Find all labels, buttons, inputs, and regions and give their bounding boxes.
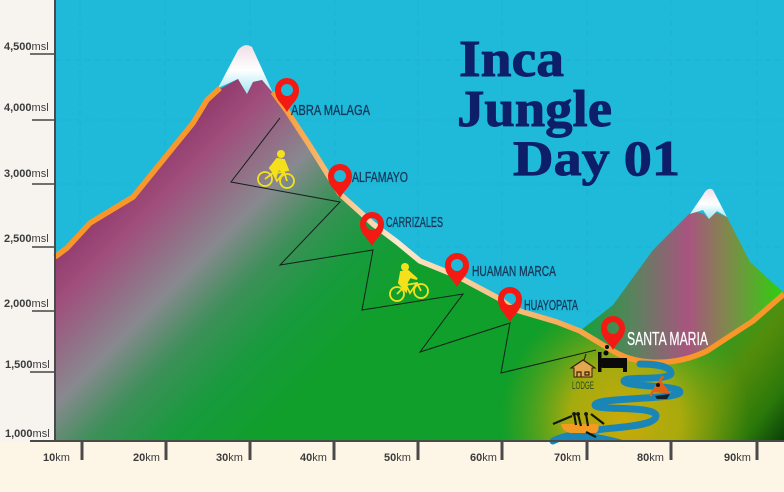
label 60km: 60km <box>470 452 497 464</box>
icon: lodge <box>571 354 595 392</box>
kayak hull <box>655 394 670 399</box>
kayaker head <box>656 383 660 387</box>
label 4,500: 4,500msl <box>4 41 49 53</box>
lodge door and roof detail <box>571 354 595 377</box>
label: Santa Maria: SANTA MARIA <box>627 329 708 349</box>
x axis line <box>30 440 784 442</box>
label: Alfamayo: ALFAMAYO <box>352 169 408 186</box>
x axis <box>30 440 784 464</box>
label 20km: 20km <box>133 452 160 464</box>
background mountain body <box>580 212 784 441</box>
y axis <box>4 0 56 442</box>
icon: kayaker <box>650 376 670 399</box>
label 40km: 40km <box>300 452 327 464</box>
pin: Alfamayo <box>328 164 352 198</box>
label 80km: 80km <box>637 452 664 464</box>
zigzag route line <box>231 118 596 373</box>
y axis line <box>54 0 56 442</box>
river channel <box>553 364 680 441</box>
pin: Santa Maria <box>601 316 625 350</box>
title line Day 01: Day 01 <box>513 130 680 186</box>
icon: cyclist lower <box>390 263 428 301</box>
label 1,000: 1,000msl <box>5 428 50 440</box>
label 50km: 50km <box>384 452 411 464</box>
rafters and paddles <box>553 413 604 437</box>
y axis ticks <box>30 54 54 441</box>
main mountain snow cap <box>218 45 273 95</box>
label 30km: 30km <box>216 452 243 464</box>
background mountain snow cap <box>690 189 727 219</box>
label 3,000: 3,000msl <box>4 168 49 180</box>
title line Inca: Inca <box>459 31 564 88</box>
label 10km: 10km <box>43 452 70 464</box>
pin: Huaman Marca <box>445 253 469 287</box>
kayaker paddle and body <box>650 376 668 396</box>
title line Jungle: Jungle <box>457 81 612 138</box>
lodge label: LODGE <box>572 380 594 392</box>
icon: rafting team <box>553 412 604 437</box>
label: Huaman Marca: HUAMAN MARCA <box>472 263 556 280</box>
river <box>550 364 680 441</box>
label 4,000: 4,000msl <box>4 102 49 114</box>
river mouth <box>550 433 626 441</box>
bottom axis background <box>0 441 784 492</box>
lodge building <box>571 360 595 377</box>
main mountain <box>55 45 784 441</box>
pin: Abra Malaga <box>275 78 299 112</box>
x axis ticks <box>82 441 757 460</box>
label: Huayopata: HUAYOPATA <box>524 297 578 314</box>
title <box>457 31 680 186</box>
icon: bed <box>598 345 627 372</box>
label 90km: 90km <box>724 452 751 464</box>
background mountain <box>580 189 784 441</box>
foreground terrain <box>55 79 784 441</box>
icon: cyclist upper <box>258 150 294 188</box>
label 1,500: 1,500msl <box>5 359 50 371</box>
raft <box>561 424 599 433</box>
label 2,500: 2,500msl <box>4 233 49 245</box>
label: Carrizales: CARRIZALES <box>386 214 443 231</box>
label 70km: 70km <box>554 452 581 464</box>
pin: Carrizales <box>360 212 384 246</box>
label: Abra Malaga: ABRA MALAGA <box>291 102 370 119</box>
elevation trail ridge line <box>55 88 784 362</box>
left axis background <box>0 0 56 441</box>
pin: Huayopata <box>498 287 522 322</box>
label 2,000: 2,000msl <box>4 298 49 310</box>
rafters heads <box>572 412 588 416</box>
